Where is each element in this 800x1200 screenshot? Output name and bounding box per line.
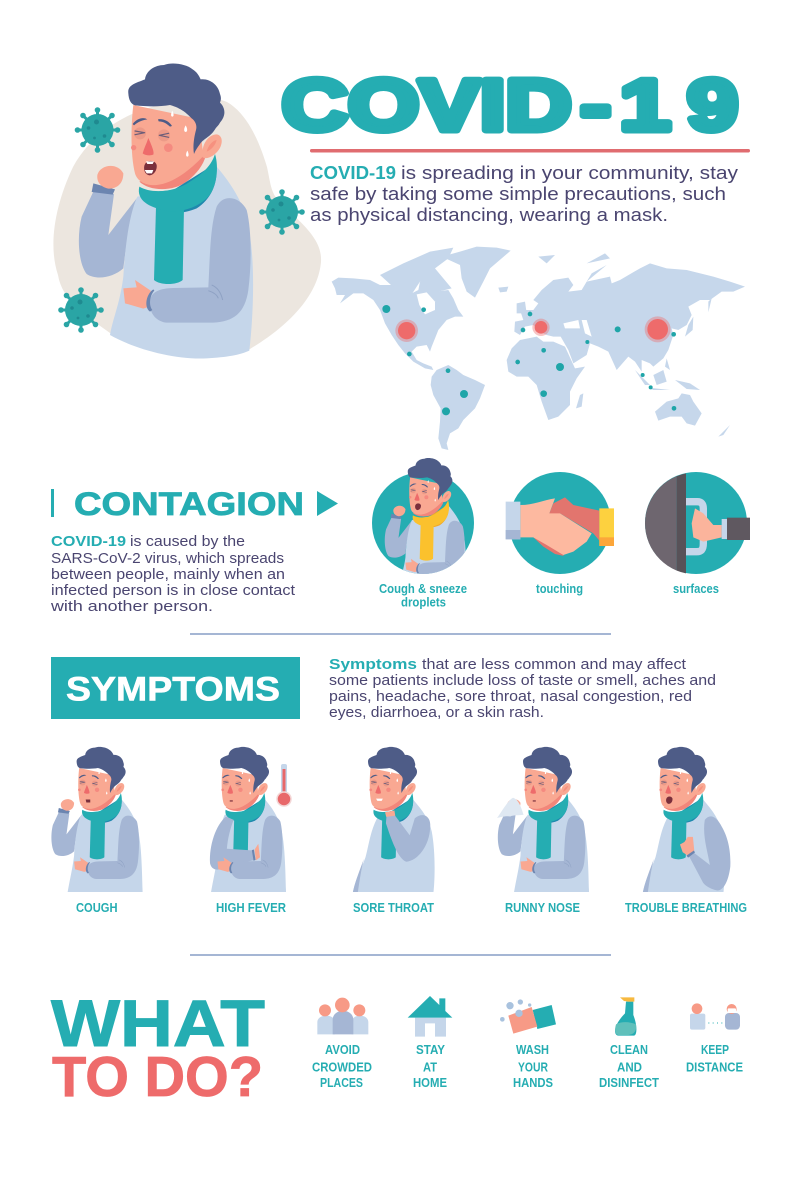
action: wash your hands: WASH xyxy=(516,1043,549,1057)
symptom: trouble breathing xyxy=(625,747,747,915)
action: avoid crowded places: PLACES xyxy=(320,1076,363,1090)
symptom: high fever: HIGH FEVER xyxy=(216,901,286,915)
icon: virus top left xyxy=(75,107,120,153)
action: avoid crowded places xyxy=(312,998,372,1090)
beige blob background xyxy=(53,97,321,354)
action: stay at home xyxy=(408,996,452,1090)
action: clean and disinfect: DISINFECT xyxy=(599,1076,659,1090)
contagion text xyxy=(50,533,296,615)
icon: handshake circle xyxy=(506,472,614,574)
teal case dots xyxy=(382,305,676,415)
symptoms text: eyes, diarrhoea, or a skin rash. xyxy=(329,704,544,721)
action: clean and disinfect xyxy=(599,997,659,1090)
world map xyxy=(332,247,745,450)
action: avoid crowded places: AVOID xyxy=(325,1043,360,1057)
action: stay at home: AT xyxy=(423,1060,437,1074)
symptoms heading xyxy=(51,657,300,719)
action: clean and disinfect: AND xyxy=(617,1060,642,1074)
red outbreak dots xyxy=(395,316,671,342)
action: stay at home: STAY xyxy=(416,1043,446,1057)
contagion heading xyxy=(51,486,338,522)
what to do heading: WHAT xyxy=(51,986,265,1060)
symptom: runny nose xyxy=(497,747,589,915)
contagion heading: CONTAGION xyxy=(74,486,304,522)
intro text: safe by taking some simple precautions, such xyxy=(310,183,726,204)
symptom: cough: COUGH xyxy=(76,901,118,915)
contagion text: with another person. xyxy=(50,598,213,615)
what to do heading xyxy=(51,986,265,1109)
symptom: cough xyxy=(51,747,143,915)
intro text: as physical distancing, wearing a mask. xyxy=(310,204,668,225)
action: keep distance xyxy=(686,1003,743,1074)
symptom: sore throat: SORE THROAT xyxy=(353,901,434,915)
intro text: is spreading in your community, stay xyxy=(401,162,739,183)
action: avoid crowded places: CROWDED xyxy=(312,1060,372,1074)
action: clean and disinfect: CLEAN xyxy=(610,1043,648,1057)
action: wash your hands: HANDS xyxy=(513,1076,553,1090)
icon: virus right xyxy=(259,189,305,235)
title: 1 xyxy=(620,66,671,146)
symptom: trouble breathing: TROUBLE BREATHING xyxy=(625,901,747,915)
action: wash your hands xyxy=(500,999,556,1090)
intro text: COVID-19 xyxy=(310,162,396,183)
symptoms text: Symptoms xyxy=(329,656,417,673)
label: cough and sneeze droplets xyxy=(379,582,467,610)
symptoms text: some patients include loss of taste or smell, aches and xyxy=(329,672,716,689)
icon: cough and sneeze circle xyxy=(372,458,474,574)
panel: coughing man illustration xyxy=(53,63,321,358)
symptoms text: pains, headache, sore throat, nasal congestion, red xyxy=(329,688,692,705)
label: cough and sneeze droplets: droplets xyxy=(401,596,446,610)
symptoms text: that are less common and may affect xyxy=(422,656,687,673)
icon: virus bottom left xyxy=(58,287,104,333)
title: COVID xyxy=(282,66,571,146)
action: keep distance: DISTANCE xyxy=(686,1060,743,1074)
contagion text: between people, mainly when an xyxy=(51,566,285,583)
contagion text: SARS-CoV-2 virus, which spreads xyxy=(51,550,284,567)
symptoms text xyxy=(329,656,716,721)
contagion text: is caused by the xyxy=(130,533,245,550)
action: stay at home: HOME xyxy=(413,1076,447,1090)
contagion text: infected person is in close contact xyxy=(51,582,296,599)
intro text xyxy=(310,162,739,225)
title: 9 xyxy=(687,66,738,146)
action: keep distance: KEEP xyxy=(701,1043,729,1057)
man figure xyxy=(79,63,253,358)
contagion text: COVID-19 xyxy=(51,533,126,550)
label: surfaces: surfaces xyxy=(673,582,719,596)
icon: thermometer xyxy=(277,764,291,806)
symptom: high fever xyxy=(210,747,291,915)
symptom: runny nose: RUNNY NOSE xyxy=(505,901,580,915)
label: cough and sneeze droplets: Cough & sneeze xyxy=(379,582,467,596)
title: - xyxy=(580,66,611,146)
label: touching: touching xyxy=(536,582,583,596)
symptom: sore throat xyxy=(353,747,435,915)
action: wash your hands: YOUR xyxy=(518,1060,548,1074)
icon: door handle surface circle xyxy=(643,470,750,577)
what to do heading: TO DO? xyxy=(52,1045,263,1109)
symptoms heading: SYMPTOMS xyxy=(66,670,280,708)
